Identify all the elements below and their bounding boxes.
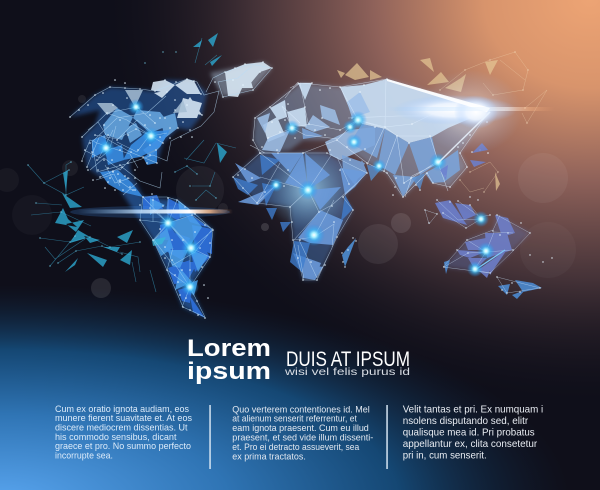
text column 2: praesent, et sed vide illum dissenti- xyxy=(232,432,373,442)
divider 2 xyxy=(386,405,388,469)
map: eurasia xyxy=(250,79,490,197)
text column 3: pri in, cum senserit. xyxy=(403,450,487,461)
text column 2: eam ignota praesent. Cum eu illud xyxy=(232,423,369,433)
text column 2: ex prima tractatos. xyxy=(232,451,306,461)
map: golden north-east asia web xyxy=(337,52,547,192)
text column 1: munere fierent suavitate et. At eos xyxy=(55,413,192,423)
title: Lorem ipsum: Lorem xyxy=(187,335,271,362)
text column 3: appellantur ex, clita consetetur xyxy=(403,439,538,450)
text column 1: Cum ex oratio ignota audiam, eos xyxy=(55,404,189,414)
title: Lorem ipsum: ipsum xyxy=(187,358,271,385)
text column 3: qualisque mea id. Pri probatus xyxy=(403,428,535,439)
lens flare: south america xyxy=(70,206,233,218)
lens flare: asia xyxy=(385,70,555,163)
text column 2: et. Pro ei detracto assueverit, sea xyxy=(232,442,360,452)
map: australia and pacific islands xyxy=(443,215,552,299)
text column 2: Quo verterem contentiones id. Mel xyxy=(232,404,370,414)
text column 1: discere mediocrem dissentias. Ut xyxy=(55,422,188,432)
subtitle: DUIS AT IPSUM: DUIS AT IPSUM xyxy=(286,348,410,371)
text column 3: Velit tantas et pri. Ex numquam i xyxy=(403,404,543,416)
text column 3: nsolens disputando sed, elitr xyxy=(403,416,529,427)
map: central and south america xyxy=(108,165,213,318)
map: south-east asia xyxy=(425,143,490,228)
map: pacific teal web xyxy=(28,33,236,292)
map: glowing hub nodes xyxy=(97,99,495,296)
text column 1: graece et pro. No summo perfecto xyxy=(55,441,191,451)
divider 1 xyxy=(209,405,211,469)
text column 2: at alienum senserit referrentur, et xyxy=(232,414,357,424)
bokeh light circles xyxy=(0,95,576,298)
text column 1: his commodo sensibus, dicant xyxy=(55,432,177,442)
map: africa xyxy=(233,148,367,280)
text column 1: incorrupte sea. xyxy=(55,450,113,460)
world map xyxy=(28,33,552,318)
text column 1 xyxy=(55,404,192,460)
text column 2 xyxy=(232,404,373,461)
title: Lorem ipsum xyxy=(187,335,271,385)
tagline: wisi vel felis purus id xyxy=(284,366,410,378)
text column 3 xyxy=(403,404,543,461)
map: soft blue haze under continents xyxy=(70,62,530,318)
map: north america and greenland xyxy=(70,62,272,197)
